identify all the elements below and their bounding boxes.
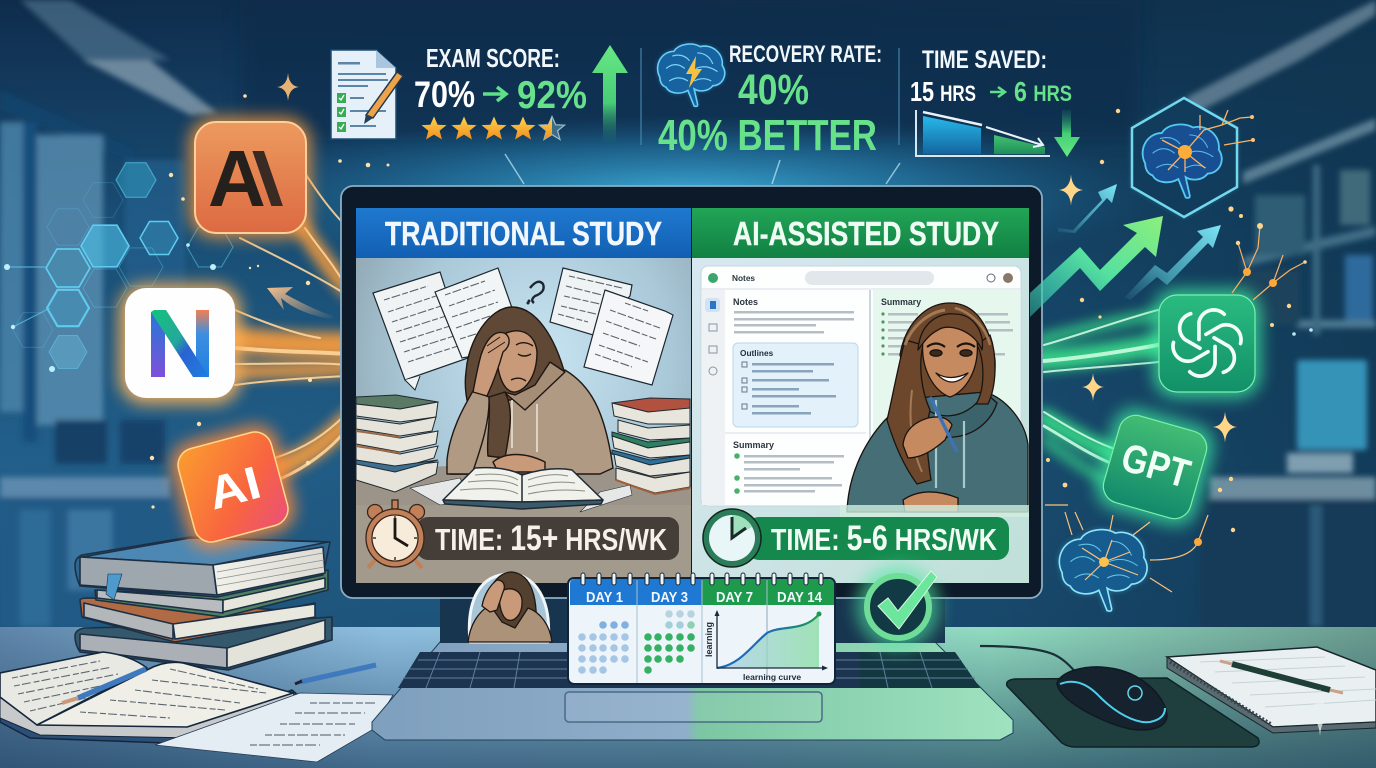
open notebook on desk, left xyxy=(0,652,300,744)
illustration: happy student xyxy=(847,303,1028,512)
icon: alarm clock xyxy=(366,500,424,568)
icon: green check mark xyxy=(856,565,940,649)
day 1 progress dots xyxy=(578,621,629,674)
icon tile: gradient AI xyxy=(166,420,300,554)
watermark sparkle xyxy=(1301,688,1339,736)
spiral notebook and pen xyxy=(1167,647,1376,733)
chart: learning curve: learning curve xyxy=(743,672,801,682)
arrow: upper blue xyxy=(1058,184,1117,233)
bottom book xyxy=(75,617,332,670)
recovery value 40%: 40% xyxy=(738,66,809,114)
icon tile: GPT: GPT xyxy=(1117,436,1195,497)
calendar binding rings xyxy=(581,573,823,585)
chart: learning curve xyxy=(704,610,828,682)
panel heading: traditional study xyxy=(356,208,691,258)
time saved values: 15 HRS xyxy=(910,76,976,107)
laptop xyxy=(372,642,1013,740)
panel: AI-assisted study xyxy=(692,208,1029,583)
icon tile: N logo xyxy=(119,284,241,404)
chart: hours drop xyxy=(916,110,1050,156)
day labels: DAY 14 xyxy=(777,589,823,606)
desk surface xyxy=(0,627,1376,768)
hexagon brain icon xyxy=(1132,98,1255,217)
exam score values xyxy=(414,74,587,117)
book stack left xyxy=(356,395,438,492)
book stack right xyxy=(612,398,690,494)
day 3 progress dots xyxy=(644,610,695,674)
icon tile: orange AI: I xyxy=(241,134,294,223)
icon: stressed student avatar xyxy=(468,572,552,642)
hair lock over hoodie xyxy=(488,392,510,458)
chart: learning curve: learning xyxy=(704,622,714,657)
heading: time saved: TIME SAVED: xyxy=(922,46,1047,74)
panel: traditional study xyxy=(356,208,691,583)
bookmark ribbon xyxy=(106,574,122,600)
time saved values: 6 HRS xyxy=(1014,76,1072,107)
heading: recovery rate: RECOVERY RATE: xyxy=(729,41,882,68)
icon tile: GPT xyxy=(1091,403,1219,531)
loose handwritten note xyxy=(155,665,393,762)
right bookshelf and monitor xyxy=(1187,0,1376,627)
calendar: day 1 to day 14 xyxy=(568,573,835,684)
arrow: peach curved arrow toward tile xyxy=(267,287,333,320)
time pill AI-assisted: TIME: 5-6 HRS/WK xyxy=(771,519,997,558)
icon tile: orange AI xyxy=(189,117,311,238)
rising arrows xyxy=(1030,184,1221,317)
time pill traditional: TIME: 15+ HRS/WK xyxy=(435,519,667,558)
sparkles and dust, left xyxy=(150,73,390,509)
stat: time saved xyxy=(910,46,1080,157)
time saved values xyxy=(910,76,1072,107)
arrow: score up xyxy=(592,45,628,142)
exam score values: 70% xyxy=(414,74,475,115)
monitor xyxy=(341,186,1042,598)
glowing brain, lower right xyxy=(1045,505,1208,611)
orange book xyxy=(80,598,315,642)
open book on desk xyxy=(410,468,632,512)
long hair falling over hoodie xyxy=(887,340,931,484)
icon tile: orange AI: A xyxy=(208,134,266,223)
stack of books on desk, left xyxy=(75,537,332,670)
icon: green clock xyxy=(703,509,761,567)
arrow: hours down xyxy=(1054,110,1080,157)
day labels: DAY 7 xyxy=(716,589,753,606)
mouse pad and glowing mouse xyxy=(980,646,1259,747)
icon: glowing brain with lightning xyxy=(658,44,725,106)
keyboard xyxy=(398,652,980,688)
panel heading: AI-assisted study: AI-ASSISTED STUDY xyxy=(733,215,999,252)
notes app window: Outlines xyxy=(740,348,774,358)
green book xyxy=(95,570,328,617)
arrow: main green growth xyxy=(1030,216,1163,317)
left window and lights xyxy=(0,0,217,627)
dividers xyxy=(505,48,900,184)
notes app window: Summary xyxy=(881,297,921,307)
stat: exam score xyxy=(331,43,628,142)
notes app window: Summary xyxy=(733,440,774,450)
top blue book xyxy=(75,537,330,597)
notes app window xyxy=(701,266,1021,506)
panel heading: traditional study: TRADITIONAL STUDY xyxy=(385,215,662,252)
arrow: right cyan xyxy=(1125,225,1221,300)
panel heading: AI-assisted study xyxy=(692,208,1029,258)
energy streaks from AI tools into monitor xyxy=(235,170,1158,480)
stat: recovery rate xyxy=(658,41,882,160)
notes app window: Notes xyxy=(732,273,755,283)
day labels: DAY 1 xyxy=(586,589,623,606)
day labels xyxy=(586,589,823,606)
trackpad xyxy=(565,692,822,722)
sparkles and nerves, right xyxy=(1046,109,1313,532)
icon: test paper and pencil xyxy=(331,50,403,139)
icon tile: gradient AI: AI xyxy=(202,456,266,520)
heading: exam score: EXAM SCORE: xyxy=(426,43,560,73)
icon tile: OpenAI knot xyxy=(1153,289,1261,398)
exam score values: 92% xyxy=(517,74,587,117)
scattered study papers xyxy=(373,268,673,390)
hexagon network decoration xyxy=(4,163,233,372)
monitor stand xyxy=(440,598,945,643)
recovery value 40% better: 40% BETTER xyxy=(658,111,877,160)
star rating xyxy=(422,116,564,140)
day labels: DAY 3 xyxy=(651,589,688,606)
illustration: stressed student xyxy=(447,307,613,474)
notes app window: Notes xyxy=(733,297,758,307)
